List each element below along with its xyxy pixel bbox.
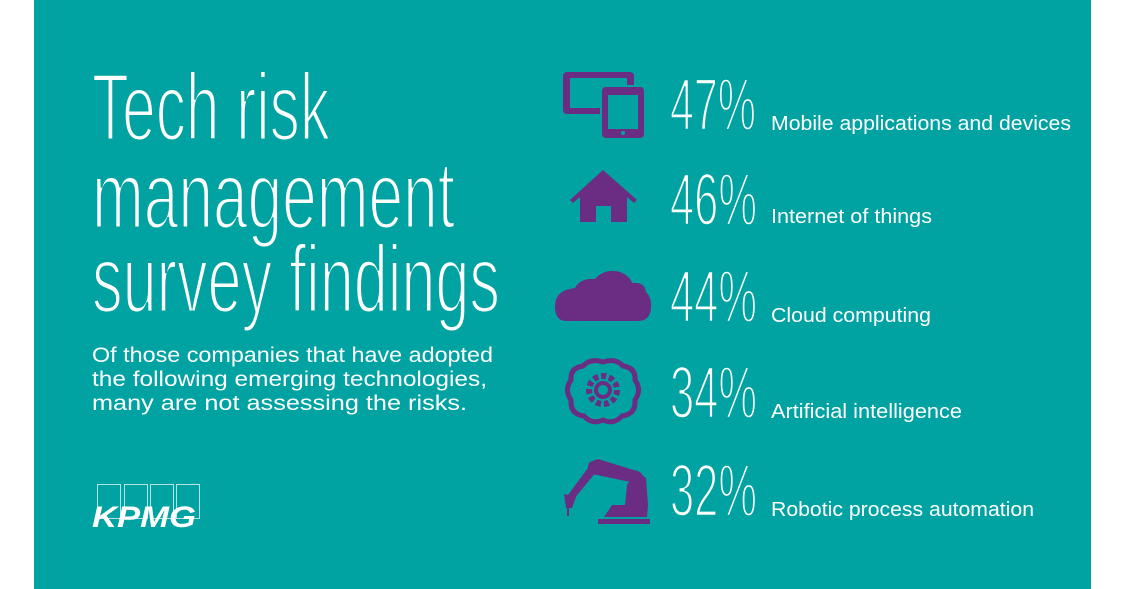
stat: 32% RPA: 32% bbox=[670, 449, 757, 532]
stat: 34% AI: 34% bbox=[670, 351, 757, 434]
stat: 32% RPA bbox=[670, 449, 1034, 532]
subtitle text: many are not assessing the risks. bbox=[92, 391, 467, 415]
stat: 47% mobile: 47% bbox=[670, 63, 756, 146]
stat: 47% mobile: Mobile applications and devices bbox=[771, 113, 1071, 135]
title: management bbox=[92, 142, 455, 249]
subtitle text: Of those companies that have adopted bbox=[92, 343, 493, 367]
logo: KPMG bbox=[92, 484, 200, 534]
subtitle text bbox=[92, 343, 493, 415]
stat: 34% AI: Artificial intelligence bbox=[771, 401, 962, 423]
title: survey findings bbox=[92, 226, 500, 333]
stat: 32% RPA: Robotic process automation bbox=[771, 499, 1034, 521]
stat: 44% cloud: Cloud computing bbox=[771, 305, 931, 327]
logo: KPMG: KPMG bbox=[92, 501, 196, 534]
stat: 44% cloud: 44% bbox=[670, 255, 757, 338]
stat: 46% IoT: 46% bbox=[670, 158, 757, 241]
icon: robotic arm bbox=[564, 459, 650, 524]
stat: 44% cloud bbox=[670, 255, 931, 338]
stat: 46% IoT bbox=[670, 158, 932, 241]
icon: AI brain bbox=[568, 361, 638, 422]
icon: mobile devices bbox=[563, 72, 646, 140]
title: Tech risk bbox=[92, 54, 331, 161]
subtitle text: the following emerging technologies, bbox=[92, 367, 487, 391]
title bbox=[92, 54, 500, 333]
stat: 47% mobile bbox=[670, 63, 1071, 146]
icon: cloud bbox=[555, 271, 651, 321]
icon: house bbox=[570, 170, 637, 222]
stat: 34% AI bbox=[670, 351, 962, 434]
stat: 46% IoT: Internet of things bbox=[771, 206, 932, 228]
